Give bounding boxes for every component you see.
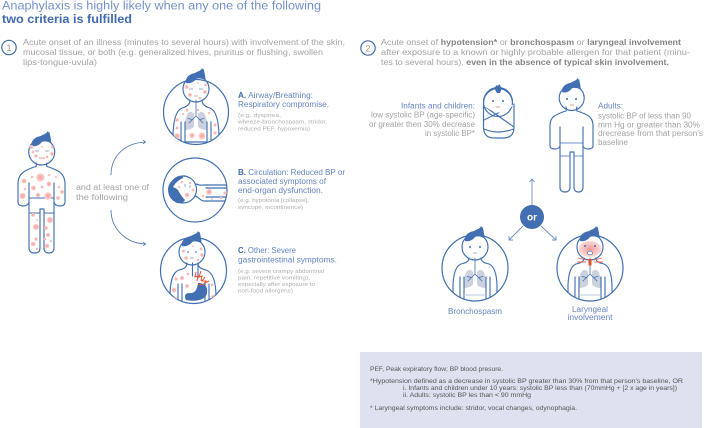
criterion 2 text	[381, 38, 690, 67]
label C: C. Other: Severe	[238, 246, 297, 255]
arrow: up to A	[111, 140, 146, 175]
criterion 1 number: 1	[6, 43, 12, 54]
label: laryngeal involvement: involvement	[568, 313, 613, 322]
adults text	[598, 102, 703, 147]
label C: pain, repetitive vomiting),	[238, 276, 310, 282]
icon: bronchospasm circle	[442, 226, 508, 303]
adults text: baseline	[598, 138, 629, 147]
infants text	[369, 102, 476, 138]
label A	[238, 91, 329, 132]
abbreviations: PEF, Peak expiratory flow; BP blood presure.	[370, 366, 503, 373]
and at least one of the following	[76, 183, 150, 202]
adults text: systolic BP of less than 90	[598, 112, 692, 120]
infants text: or greater then 30% decrease	[369, 120, 476, 129]
label C: especially after exposure to	[238, 282, 315, 288]
label B: B. Circulation: Reduced BP or	[238, 168, 345, 177]
or badge	[520, 205, 544, 229]
arrow: down left	[509, 226, 523, 240]
label A: Respiratory compromise.	[238, 100, 329, 109]
criterion 1 text: lips-tongue-uvula)	[23, 58, 97, 67]
hypotension note	[370, 378, 683, 399]
icon: adult figure	[550, 78, 593, 192]
hypotension note: ii. Adults: systolic BP les than < 90 mmHg	[403, 392, 531, 399]
infants text: Infants and children:	[401, 102, 475, 110]
label C: non-food allergens)	[238, 288, 293, 294]
criterion 1 text: mucosal tissue, or both (e.g. generalized hives, pruritus or flushing, swollen	[23, 48, 323, 57]
title: two criteria is fulfilled	[2, 12, 132, 26]
label: bronchospasm: Bronchospasm	[448, 307, 502, 316]
criterion 1 text	[23, 38, 345, 67]
adults text: drecrease from that person's	[598, 129, 703, 138]
hypotension note: i. Infants and children under 10 years: systolic BP less than (70mmHg + [2 x age in years])	[403, 385, 677, 392]
label C: gastrointestinal symptoms.	[238, 256, 337, 264]
icon: airway circle	[164, 68, 228, 150]
criterion 2 number	[361, 41, 375, 55]
hypotension note: *Hypotension defined as a decrease in systolic BP greater than 30% from that person's baseline, OR	[370, 378, 683, 385]
arrow: up	[530, 179, 534, 205]
label A: wheeze-bronchospasm, stridor,	[238, 120, 327, 126]
criterion 1 text: Acute onset of an illness (minutes to several hours) with involvement of the skin,	[23, 38, 345, 47]
icon: swaddled infant	[484, 84, 514, 138]
label A: A. Airway/Breathing:	[238, 91, 313, 100]
criterion 1 number	[2, 40, 16, 55]
icon: gastrointestinal circle	[160, 231, 226, 310]
label A: reduced PEF, hypoxemia)	[238, 126, 310, 132]
label B: (e.g. hypotonia [collapse],	[238, 198, 309, 204]
label C	[238, 246, 337, 294]
and at least one of the following: and at least one of	[76, 183, 150, 192]
label C: (e.g. severe crampy abdominal	[238, 269, 324, 275]
criterion 2 text: after exposure to a known or highly probable allergen for that patient (minu-	[381, 48, 690, 57]
arrow: down to C	[111, 210, 146, 246]
infants text: low systolic BP (age-specific)	[371, 110, 475, 120]
icon: circulation circle	[163, 158, 228, 222]
adults text: Adults:	[598, 102, 623, 110]
label: laryngeal involvement: Laryngeal	[572, 305, 608, 314]
and at least one of the following: the following	[76, 193, 128, 202]
adults text: mm Hg or greater than 30%	[598, 120, 700, 130]
arrow: down right	[541, 226, 556, 240]
label A: (e.g. dyspnea,	[238, 113, 281, 119]
label B: end-organ dysfunction.	[238, 186, 323, 195]
infants text: in systolic BP*	[425, 129, 475, 138]
icon: full body with hives	[18, 131, 65, 253]
label B: syncope, incontinence)	[238, 205, 303, 211]
criterion 2 number: 2	[365, 44, 371, 54]
footnote panel	[360, 352, 702, 428]
title	[2, 0, 321, 26]
laryngeal note: * Laryngeal symptoms include: stridor, vocal changes, odynophagia.	[370, 405, 577, 412]
or badge: or	[527, 212, 537, 224]
icon: laryngeal circle	[557, 226, 623, 303]
criterion 2 text: Acute onset of hypotension* or bronchospasm or laryngeal involvement	[381, 38, 681, 47]
label B	[238, 168, 345, 211]
label: laryngeal involvement	[568, 305, 613, 322]
criterion 2 text: tes to several hours), even in the absence of typical skin involvement.	[381, 58, 669, 67]
label B: associated symptoms of	[238, 177, 327, 186]
